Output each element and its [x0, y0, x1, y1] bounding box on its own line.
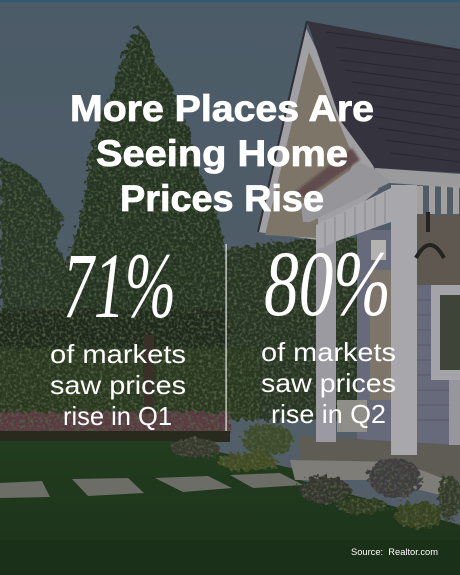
stat caption Q1: rise in Q1 [63, 401, 172, 431]
stat number 71%: 71% [63, 235, 176, 338]
mid foliage [0, 310, 228, 352]
source: Source: Realtor.com [351, 547, 438, 557]
stat caption Q2: rise in Q2 [271, 399, 386, 429]
stat caption Q1: saw prices [50, 370, 186, 400]
dark overlay lawn shade [0, 540, 460, 575]
dark left roof edge [258, 21, 307, 232]
stat caption Q1 [50, 339, 186, 431]
balcony box [301, 163, 391, 222]
stat caption Q1: of markets [50, 339, 186, 369]
front door [370, 270, 391, 400]
roof [307, 21, 460, 173]
garden flowers and shrubs [171, 424, 460, 528]
house wall [357, 230, 460, 445]
title: Seeing Home [96, 133, 348, 174]
left tree [0, 158, 75, 360]
lawn [0, 441, 460, 575]
stepping stones [0, 473, 303, 498]
hedge [0, 348, 260, 420]
stat: Q2 [261, 233, 396, 429]
upper porch balusters [417, 186, 459, 214]
pink flower bed [0, 412, 230, 434]
chandelier [416, 212, 444, 258]
stat: Q1 [50, 235, 186, 431]
title [70, 88, 374, 219]
porch columns [316, 235, 336, 442]
title: More Places Are [70, 88, 374, 129]
wall window [431, 285, 460, 380]
divider [226, 244, 227, 431]
cream siding [265, 52, 354, 238]
tall pine tree [55, 26, 232, 350]
stat caption Q2 [261, 337, 396, 429]
porch floor and path [300, 436, 460, 480]
planter [337, 400, 367, 432]
house gable [258, 21, 460, 260]
porch lantern [371, 240, 386, 260]
eave fascia [375, 168, 460, 188]
stat caption Q2: of markets [261, 337, 396, 367]
balcony flower box [295, 148, 360, 198]
stat caption Q2: saw prices [261, 368, 396, 398]
stat number 80%: 80% [264, 233, 391, 336]
white fascia [258, 28, 378, 240]
balcony rail [316, 188, 391, 250]
tree trunk [144, 335, 154, 443]
title: Prices Rise [120, 178, 324, 219]
background shrubs behind porch [226, 235, 360, 420]
porch interior [417, 215, 460, 285]
